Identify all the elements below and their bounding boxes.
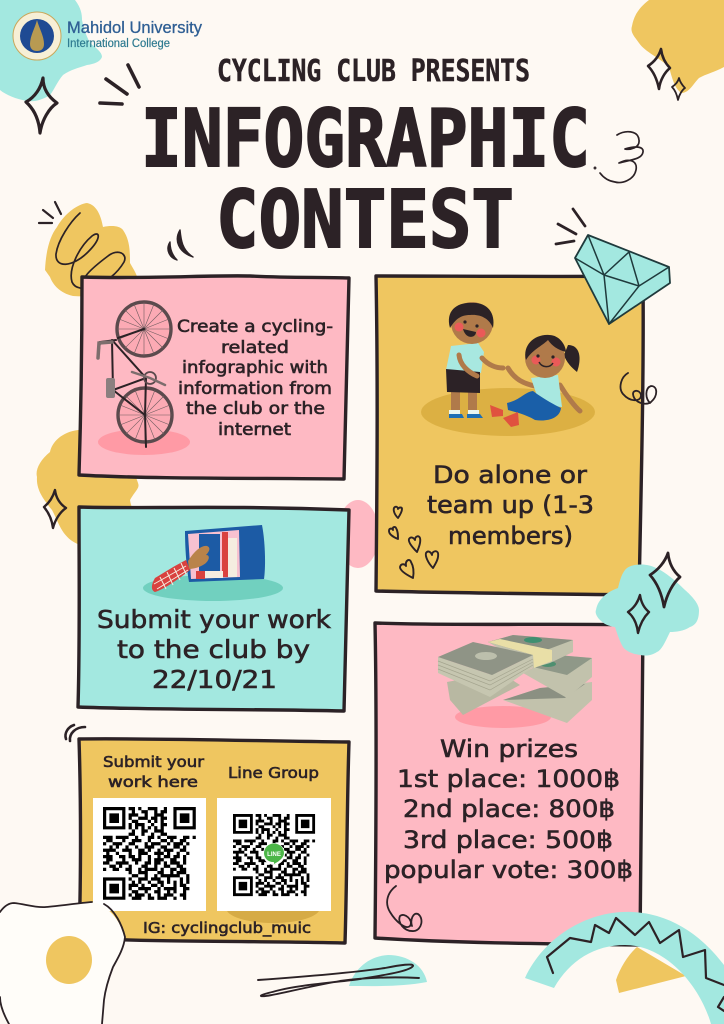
panel text: Create a cycling- <box>177 317 333 336</box>
decoration: bottom-right arch <box>525 912 724 1024</box>
panel background <box>79 739 349 943</box>
panel text: 3rd place: 500฿ <box>403 826 613 854</box>
scribble <box>56 213 126 293</box>
icon: hearts <box>389 507 438 578</box>
blob: top-right yellow <box>631 0 724 93</box>
icon: diamond <box>556 209 670 324</box>
icon: rays by scribble <box>39 202 61 223</box>
logo text: Mahidol University <box>67 19 203 37</box>
panel background <box>375 623 643 945</box>
subtitle: CYCLING CLUB PRESENTS <box>217 54 530 89</box>
panel text: infographic with <box>182 358 328 377</box>
panel text <box>384 735 633 884</box>
panel text: to the club by <box>117 635 310 664</box>
panel: create infographic <box>79 276 349 479</box>
teal arch <box>525 912 724 1024</box>
panel text: 2nd place: 800฿ <box>403 795 615 823</box>
panel text: team up (1-3 <box>427 491 594 519</box>
instagram handle: IG: cyclingclub_muic <box>143 919 311 938</box>
QR captions: Line Group <box>228 764 319 782</box>
yellow blob shape <box>45 203 138 296</box>
lower-left stack <box>447 672 520 715</box>
title line 1: INFOGRAPHIC <box>141 93 590 185</box>
lower-right stack <box>503 682 592 723</box>
panel text: information from <box>178 379 332 398</box>
panel text: Win prizes <box>440 735 578 763</box>
panel background <box>78 507 349 711</box>
panel: QR codes <box>79 739 349 943</box>
title line 2: CONTEST <box>216 174 514 266</box>
money band <box>488 639 552 668</box>
panel text <box>177 317 333 439</box>
icon: squiggle beside title <box>594 132 643 182</box>
top-back stack <box>488 635 573 668</box>
panel: submit <box>78 507 349 711</box>
panel text <box>427 461 594 550</box>
icon: sparkle on left yellow blob <box>44 490 66 528</box>
icon: swirl right of team panel <box>621 373 656 404</box>
panel background <box>79 276 349 479</box>
blob: right teal <box>596 564 699 656</box>
panel: prizes <box>375 623 643 945</box>
panel background <box>376 276 643 595</box>
panel: team up <box>376 276 643 595</box>
big front stack <box>438 655 533 697</box>
blob: top-left teal <box>0 0 102 101</box>
blob: yellow with scribble <box>45 203 138 296</box>
decoration: bottom scribble <box>258 955 427 996</box>
QR code: line group <box>217 798 331 911</box>
money shadow <box>455 706 551 728</box>
logo: university <box>13 12 203 60</box>
diamond body <box>575 235 670 324</box>
icon: swirl in prizes panel <box>387 886 421 931</box>
illustration: hand and books <box>143 525 283 601</box>
icon: sparkle right large <box>650 553 680 607</box>
panel text: members) <box>448 522 573 550</box>
yellow wedge <box>616 947 686 993</box>
QR code: submission <box>93 798 206 911</box>
QR captions: work here <box>108 773 198 791</box>
icon: sparkle top-right small <box>672 78 685 100</box>
panel text: Do alone or <box>433 461 587 489</box>
panel text: related <box>221 338 289 357</box>
icon: sparkle top-right large <box>648 49 670 89</box>
illustration: money <box>438 635 592 728</box>
shadow under QR <box>226 893 320 923</box>
blob: left yellow <box>37 430 150 545</box>
icon: bicycle <box>98 302 190 455</box>
panel text <box>97 605 332 694</box>
blob: pink behind cards <box>337 500 379 568</box>
logo seal <box>13 12 61 60</box>
middle-right stack <box>523 655 592 698</box>
QR captions: Submit your <box>103 753 205 771</box>
zigzag line <box>547 918 724 1011</box>
panel text: the club or the <box>186 399 325 418</box>
icon: curved marks above QR panel <box>65 725 85 741</box>
QR captions <box>103 753 319 791</box>
panel text: internet <box>218 420 292 439</box>
girl <box>490 335 580 427</box>
panel text: popular vote: 300฿ <box>384 856 633 884</box>
diamond rays <box>556 209 585 244</box>
icon: line logo: LINE <box>267 852 281 858</box>
logo: university: International College <box>67 38 170 50</box>
illustration: fried egg <box>0 902 125 1024</box>
illustration: children <box>421 302 595 436</box>
icon: sparkle right small <box>628 595 649 633</box>
icon: curved marks <box>168 230 193 260</box>
panel text: Submit your work <box>97 605 332 634</box>
icon: rays near title <box>100 65 139 104</box>
panel text: 1st place: 1000฿ <box>397 765 620 793</box>
panel text: 22/10/21 <box>152 665 277 694</box>
icon: sparkle top-left <box>26 78 57 133</box>
boy <box>446 302 503 418</box>
